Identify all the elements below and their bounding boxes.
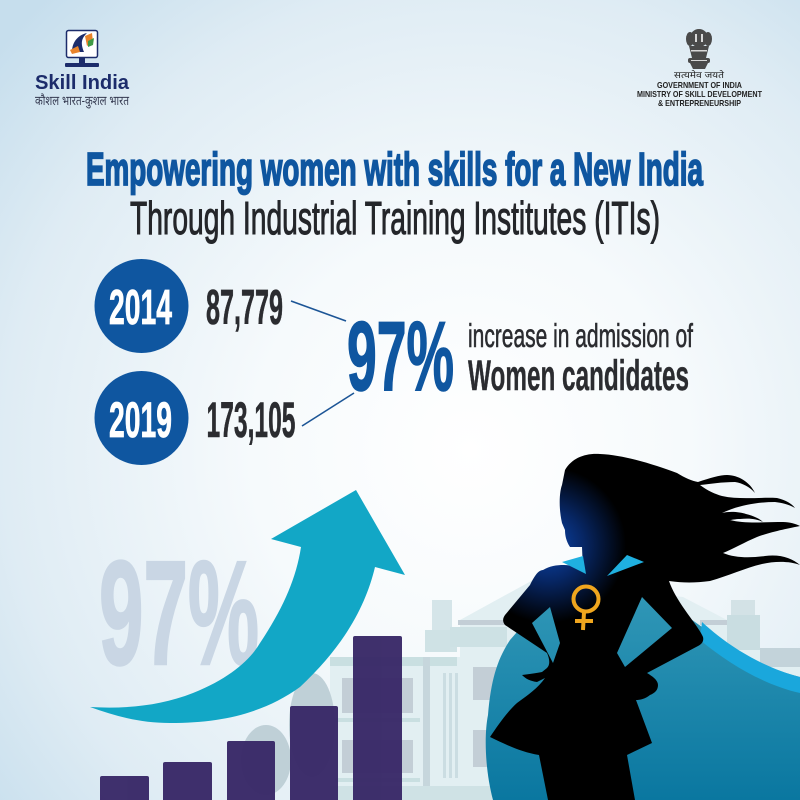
logo: Skill India: [35, 30, 130, 109]
building illustration: [330, 580, 800, 800]
stat caption: [468, 317, 694, 400]
year badge 2014: 2014: [109, 281, 172, 335]
logo: Government of India: [637, 29, 762, 108]
silhouette: superwoman: [490, 454, 800, 800]
logo wordmark: Skill India: [35, 71, 130, 94]
year badge 2019: [94, 371, 188, 465]
year badge 2014: [94, 259, 188, 353]
year badge 2019: 2019: [109, 392, 172, 448]
faded 97% background: 97%: [99, 531, 259, 696]
ministry text line 3: & ENTREPRENEURSHIP: [658, 99, 741, 108]
ministry text line 1: GOVERNMENT OF INDIA: [657, 81, 742, 90]
connector lines: [291, 301, 354, 426]
stat: 2014: [94, 259, 283, 353]
big stat: 97%: 97%: [347, 301, 454, 411]
trees behind bars: [241, 673, 335, 795]
cape highlight band: [700, 622, 800, 693]
arrow: growth: [90, 490, 405, 723]
infographic canvas: 173,105: [206, 392, 296, 448]
cape: [486, 590, 800, 800]
logo tagline: कौशल भारत-कुशल भारत: [35, 93, 129, 109]
value 87,779: 87,779: [206, 281, 283, 335]
icon: monitor: [65, 30, 99, 67]
stat: 2019: [94, 371, 296, 465]
motto: सत्यमेव जयते: [674, 69, 725, 80]
bar chart: [100, 636, 402, 800]
icon: national emblem: [686, 29, 712, 69]
icon: female symbol: [574, 586, 598, 630]
ministry text line 2: MINISTRY OF SKILL DEVELOPMENT: [637, 90, 762, 99]
cape collar: [562, 555, 644, 576]
